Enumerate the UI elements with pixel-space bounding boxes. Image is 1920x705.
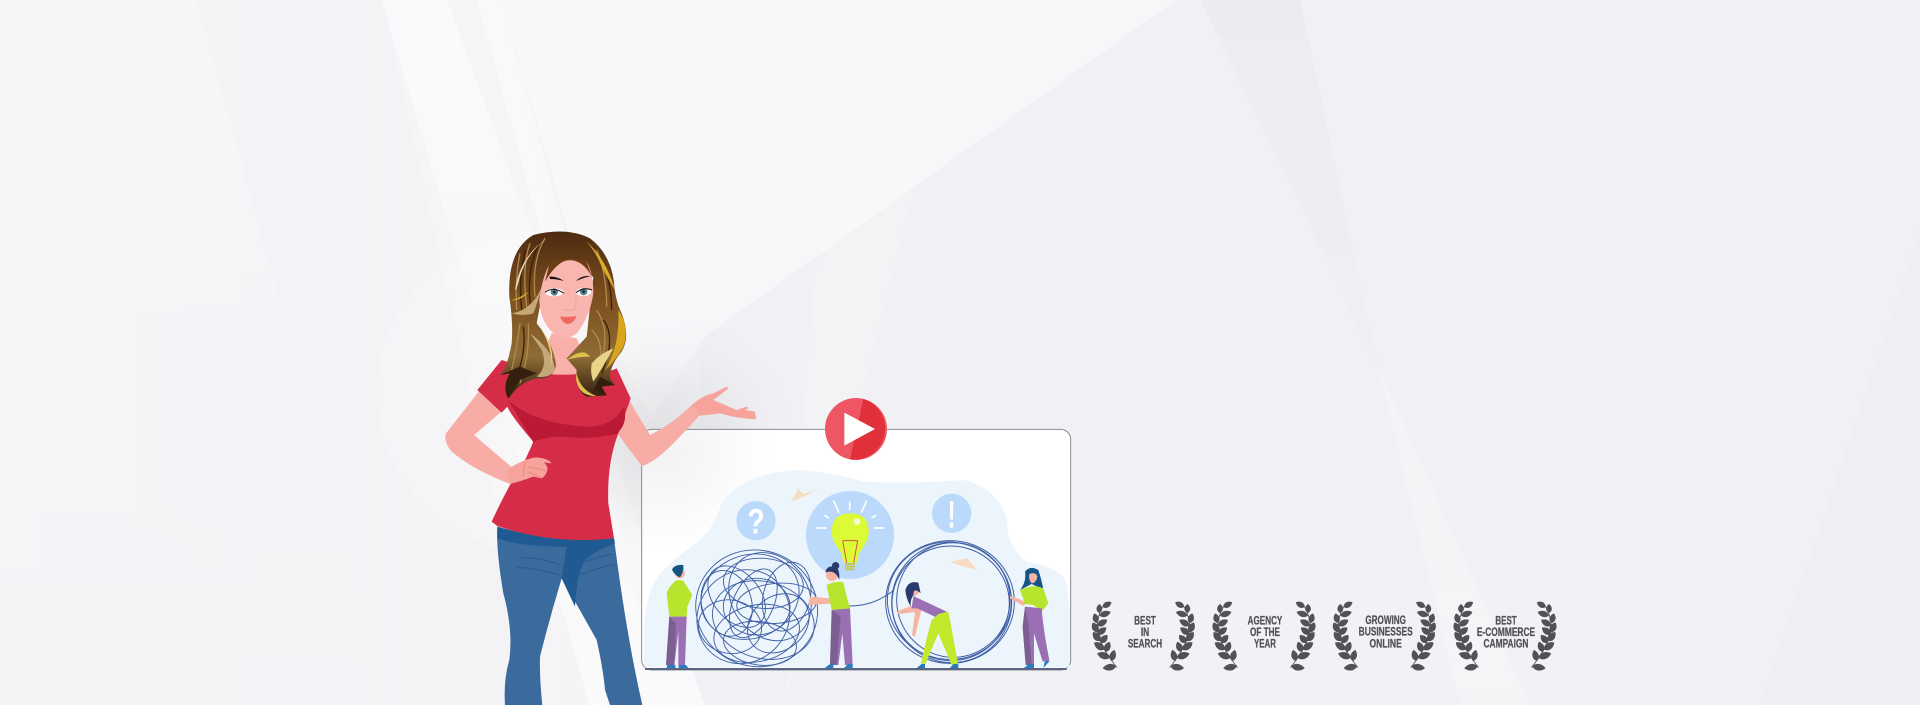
question mark bubble: ? [747, 502, 765, 541]
light bulb idea [806, 491, 894, 579]
long hair [500, 232, 626, 399]
paper planes [792, 488, 977, 570]
award: growing businesses online: ONLINE [1369, 636, 1402, 650]
award: agency of the year: YEAR [1254, 637, 1276, 651]
question mark bubble [736, 501, 776, 541]
award: best e-commerce campaign: BEST [1495, 613, 1517, 627]
award: best in search: IN [1141, 625, 1149, 639]
neat ring of thread [848, 534, 1019, 669]
chest and neck [545, 333, 588, 380]
award: best e-commerce campaign [1451, 600, 1559, 671]
award: best e-commerce campaign: E-COMMERCE [1477, 625, 1535, 639]
hand on hip [506, 457, 552, 484]
red t-shirt [477, 360, 631, 540]
award: growing businesses online [1331, 600, 1438, 671]
person: woman pulling thread [808, 562, 853, 668]
card base line [645, 668, 1067, 670]
award: agency of the year [1210, 600, 1318, 671]
exclamation bubble: ! [948, 494, 956, 537]
presenter woman [445, 232, 756, 705]
left arm [445, 390, 515, 484]
award: growing businesses online: GROWING [1365, 613, 1406, 627]
award: agency of the year: AGENCY [1248, 613, 1282, 627]
award: growing businesses online: BUSINESSES [1359, 625, 1413, 639]
video card [547, 353, 1071, 684]
pale blue scene blob [644, 470, 1070, 667]
exclamation bubble [932, 494, 971, 537]
person: man looking at tangle [666, 565, 692, 668]
awards strip [1082, 592, 1572, 695]
card inner shadow [547, 353, 773, 553]
right arm and hand [617, 387, 756, 466]
person: woman bending in ring [897, 582, 958, 668]
play button [825, 398, 887, 460]
award: agency of the year: OF THE [1250, 625, 1280, 639]
tangled scribble [678, 533, 834, 684]
person: woman with long hair [1010, 568, 1050, 668]
face [539, 259, 593, 338]
award: best in search [1090, 600, 1197, 671]
award: best e-commerce campaign: CAMPAIGN [1483, 636, 1528, 650]
award: best in search: BEST [1134, 613, 1156, 627]
award: best in search: SEARCH [1128, 637, 1162, 651]
jeans [497, 527, 642, 705]
